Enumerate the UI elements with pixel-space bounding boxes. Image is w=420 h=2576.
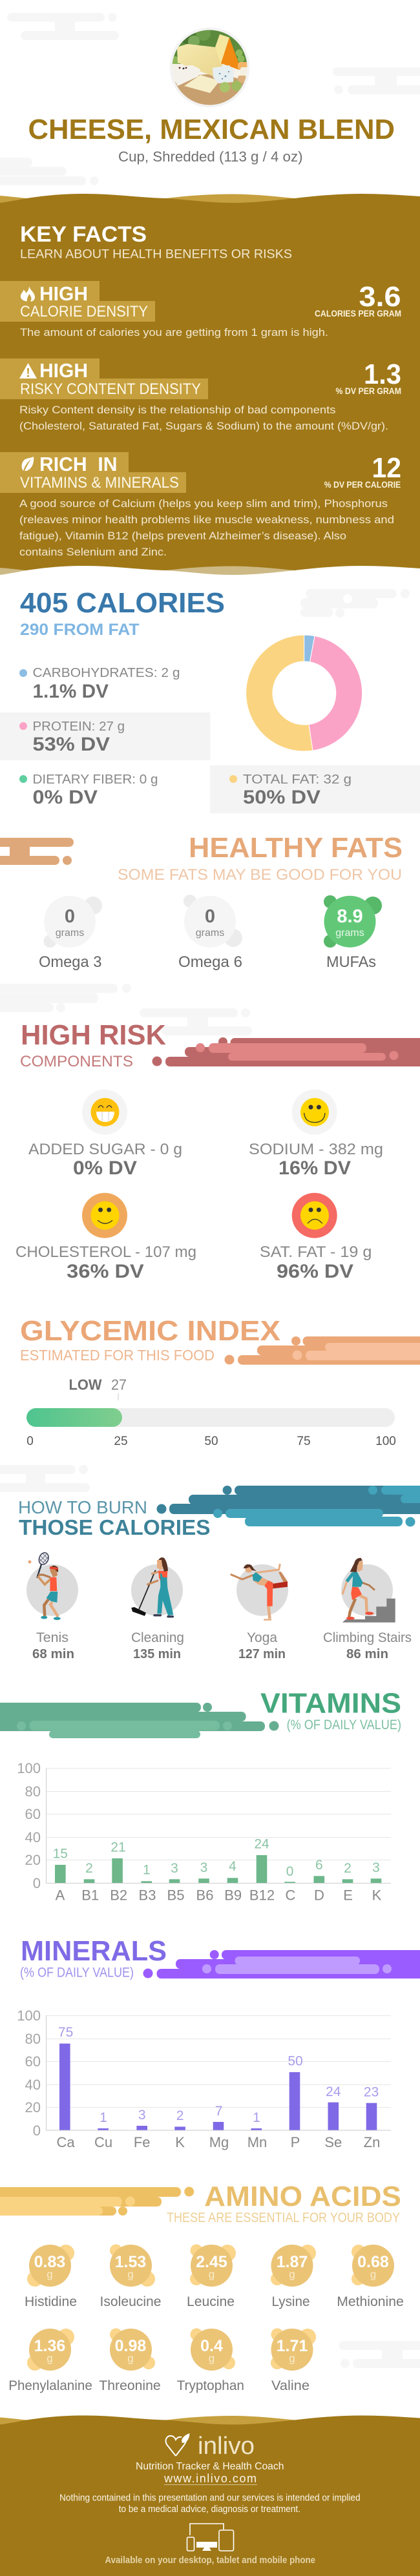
bar chart: vitamins: B9	[224, 1887, 242, 1904]
legend: protein: 53% DV	[32, 734, 110, 755]
description: (releaves minor health problems like muscle weakness, numbness and	[19, 514, 394, 526]
panel: amino acids	[0, 2181, 420, 2393]
amino acids heading: AMINO ACIDS	[204, 2181, 401, 2212]
amino: lysine	[271, 2245, 316, 2309]
bar chart: minerals: 3	[138, 2108, 146, 2123]
decorative bars	[152, 1037, 420, 1066]
amino: methionine: 0.68	[357, 2253, 389, 2271]
amino: threonine	[99, 2328, 161, 2393]
bar chart: vitamins: K	[372, 1887, 382, 1904]
calories heading: 405 CALORIES	[20, 588, 225, 619]
description: A good source of Calcium (helps you keep slim and trim), Phosphorus	[19, 497, 388, 510]
component: saturated fat	[260, 1193, 372, 1282]
bar chart: vitamins: 24	[254, 1837, 269, 1852]
burn heading line 2: THOSE CALORIES	[19, 1515, 211, 1539]
panel: burn calories	[0, 1465, 420, 1661]
icon: leaf	[22, 457, 34, 471]
legend: carbohydrates: CARBOHYDRATES: 2 g	[32, 666, 180, 680]
unit: calories per gram: CALORIES PER GRAM	[315, 309, 401, 318]
amino: isoleucine: 1.53	[115, 2253, 146, 2271]
bar chart: minerals: Se	[324, 2134, 342, 2150]
unit: dv per calorie: % DV PER CALORIE	[324, 480, 401, 490]
activity: yoga	[231, 1564, 288, 1661]
bar chart: vitamins: 21	[110, 1840, 126, 1855]
amino: valine: g	[289, 2353, 295, 2365]
amino: leucine	[187, 2244, 236, 2309]
amino: methionine: Methionine	[337, 2294, 404, 2309]
panel: calories	[0, 588, 420, 813]
fact: risky content density	[0, 358, 401, 432]
legend: total fat: 50% DV	[243, 787, 320, 808]
bar chart: minerals	[17, 2008, 391, 2150]
icon: devices	[187, 2524, 234, 2551]
value: 1.3: 1.3	[364, 358, 401, 390]
bar chart: minerals: Ca	[57, 2134, 75, 2150]
legend: dietary fiber: 0% DV	[32, 787, 98, 808]
bar chart: minerals: 100	[17, 2008, 41, 2024]
bar chart: vitamins: 15	[53, 1847, 68, 1862]
activity: climbing stairs	[323, 1558, 412, 1661]
label: high: HIGH	[39, 282, 88, 305]
legend: carbohydrates	[19, 666, 180, 702]
disclaimer	[59, 2493, 361, 2515]
background clouds top	[0, 13, 420, 185]
key facts subheading: LEARN ABOUT HEALTH BENEFITS OR RISKS	[20, 247, 292, 261]
amino: methionine: g	[370, 2269, 376, 2281]
gi gauge bar	[26, 1408, 395, 1427]
amino: tryptophan: Tryptophan	[177, 2378, 244, 2393]
bar chart: minerals: Fe	[134, 2134, 151, 2150]
component: saturated fat: 96% DV	[277, 1261, 353, 1282]
decorative bars	[0, 838, 74, 865]
description: The amount of calories you are getting from 1 gram is high.	[20, 326, 328, 338]
amino: threonine: g	[127, 2353, 134, 2365]
bar chart: vitamins: 40	[25, 1829, 41, 1845]
description: fatigue), Vitamin B12 (helps prevent Alzheimer’s disease). Also	[19, 530, 346, 542]
amino: leucine: g	[209, 2269, 215, 2281]
panel: high risk components	[0, 984, 420, 1282]
mufas	[324, 895, 382, 971]
activity: cleaning: 135 min	[133, 1647, 181, 1661]
unit: dv per gram: % DV PER GRAM	[336, 386, 401, 396]
healthy fats subheading: SOME FATS MAY BE GOOD FOR YOU	[118, 866, 402, 884]
fact: calorie density	[0, 281, 401, 338]
omega 6	[178, 895, 242, 971]
burn heading line 1: HOW TO BURN	[18, 1497, 147, 1517]
description: (Cholesterol, Saturated Fat, Sugars & Sodium) to the amount (%DV/gr).	[19, 420, 388, 432]
amino: threonine: Threonine	[99, 2378, 161, 2393]
activity label: Climbing Stairs	[323, 1630, 412, 1645]
activity: tennis	[26, 1552, 78, 1661]
footer	[0, 2416, 420, 2576]
bar chart: minerals: 23	[364, 2085, 379, 2100]
donut chart	[246, 635, 362, 751]
bar chart: vitamins: 20	[25, 1852, 41, 1868]
food photo: cheese platter	[169, 26, 250, 107]
bar chart: vitamins: D	[314, 1887, 324, 1904]
panel: key facts	[0, 194, 420, 585]
glycemic index heading: GLYCEMIC INDEX	[20, 1316, 280, 1347]
amino: histidine	[25, 2245, 77, 2309]
bar chart: minerals: Mg	[209, 2134, 229, 2150]
component: added sugar: 0% DV	[73, 1158, 137, 1179]
omega 3: 0	[65, 906, 75, 927]
decorative bars	[0, 1703, 279, 1738]
activity: tennis: 68 min	[32, 1647, 74, 1661]
component: saturated fat: SAT. FAT - 19 g	[260, 1243, 372, 1261]
amino: phenylalanine: g	[47, 2353, 53, 2365]
bar chart: vitamins: 100	[17, 1760, 41, 1776]
activity: yoga: 127 min	[238, 1647, 286, 1661]
amino: threonine: 0.98	[115, 2337, 146, 2355]
legend: carbohydrates: 1.1% DV	[32, 681, 109, 702]
bar chart: vitamins: 3	[372, 1860, 380, 1875]
legend: protein	[0, 712, 211, 760]
bar chart: vitamins: C	[285, 1887, 295, 1904]
description	[19, 404, 388, 432]
amino: isoleucine	[100, 2244, 162, 2309]
gi axis labels: 50	[204, 1435, 218, 1448]
panel: healthy fats	[0, 832, 403, 971]
bar chart: minerals: 24	[326, 2084, 341, 2099]
bar chart: minerals: 1	[100, 2110, 107, 2125]
bar chart: vitamins: A	[56, 1887, 65, 1904]
high risk subheading: COMPONENTS	[20, 1053, 133, 1070]
legend: dietary fiber: DIETARY FIBER: 0 g	[32, 773, 158, 787]
bar chart: minerals: 80	[25, 2031, 41, 2047]
amino: methionine	[337, 2245, 404, 2309]
bar chart: vitamins: B2	[110, 1887, 127, 1904]
bar chart: vitamins: 60	[25, 1806, 41, 1822]
vitamins heading: VITAMINS	[260, 1688, 401, 1719]
gi axis labels: 75	[297, 1435, 311, 1448]
glycemic index subheading: ESTIMATED FOR THIS FOOD	[20, 1347, 215, 1364]
amino: lysine: g	[289, 2269, 295, 2281]
description: contains Selenium and Zinc.	[19, 546, 167, 558]
bar chart: minerals: 60	[25, 2053, 41, 2070]
activity label: Yoga	[247, 1630, 277, 1645]
component: cholesterol: 36% DV	[67, 1261, 144, 1282]
bar chart: vitamins: 3	[200, 1860, 207, 1875]
amino: valine	[271, 2328, 316, 2393]
amino: histidine: 0.83	[34, 2253, 65, 2271]
amino: lysine: Lysine	[271, 2294, 310, 2309]
label: rich in: RICH IN	[39, 453, 118, 475]
component: cholesterol: CHOLESTEROL - 107 mg	[16, 1243, 196, 1261]
value: 12: 12	[372, 452, 401, 484]
amino: leucine: 2.45	[196, 2253, 227, 2271]
bar chart: vitamins: B6	[196, 1887, 213, 1904]
activity label: Tenis	[36, 1630, 68, 1645]
bar chart: vitamins: 6	[315, 1858, 323, 1873]
bar chart: minerals: Zn	[364, 2134, 380, 2150]
mufas: 8.9	[337, 906, 363, 927]
bar chart: vitamins: 0	[286, 1864, 293, 1879]
title: CHEESE, MEXICAN BLEND	[28, 114, 395, 145]
availability note: Available on your desktop, tablet and mobile phone	[105, 2555, 315, 2566]
label: risky content density: RISKY CONTENT DENSITY	[20, 380, 201, 398]
component: sodium: 16% DV	[278, 1158, 351, 1179]
brand name: inlivo	[198, 2433, 255, 2460]
bar chart: minerals: 0	[33, 2123, 41, 2139]
omega 6: grams	[196, 928, 224, 939]
decorative bars	[143, 1950, 420, 1979]
disclaimer: to be a medical advice, diagnosis or treatment.	[119, 2504, 300, 2515]
omega 3	[39, 896, 102, 971]
bar chart: vitamins: B3	[139, 1887, 156, 1904]
omega 6: Omega 6	[178, 953, 242, 971]
gi rating label: LOW	[68, 1376, 102, 1393]
legend: protein: PROTEIN: 27 g	[32, 720, 125, 734]
component: sodium	[249, 1090, 383, 1179]
legend: total fat: TOTAL FAT: 32 g	[243, 773, 352, 787]
panel: glycemic index	[20, 1316, 420, 1448]
tagline: Nutrition Tracker & Health Coach	[136, 2461, 284, 2472]
amino: tryptophan: 0.4	[200, 2337, 223, 2355]
gi axis labels: 100	[375, 1435, 396, 1448]
healthy fats heading: HEALTHY FATS	[189, 832, 403, 864]
amino: histidine: Histidine	[25, 2294, 77, 2309]
amino: isoleucine: Isoleucine	[100, 2294, 162, 2309]
legend: total fat	[210, 765, 420, 813]
label: high: HIGH	[39, 359, 88, 382]
fact: rich in vitamins and minerals	[0, 452, 401, 558]
amino: lysine: 1.87	[277, 2253, 308, 2271]
icon: flame	[21, 286, 35, 302]
amino: leucine: Leucine	[187, 2294, 235, 2309]
from fat subheading: 290 FROM FAT	[20, 621, 140, 639]
background cloud	[0, 1465, 90, 1492]
bar chart: vitamins: 2	[85, 1861, 93, 1876]
background clouds	[0, 984, 252, 1035]
decorative bars	[156, 1486, 420, 1527]
omega 3: grams	[56, 928, 84, 939]
bar chart: minerals: Cu	[94, 2134, 112, 2150]
bar chart: minerals: Mn	[247, 2134, 267, 2150]
component: added sugar: ADDED SUGAR - 0 g	[28, 1141, 182, 1158]
amino: tryptophan	[177, 2328, 244, 2393]
disclaimer: Nothing contained in this presentation and our services is intended or implied	[59, 2493, 361, 2504]
bar chart: vitamins: B5	[167, 1887, 184, 1904]
key facts heading: KEY FACTS	[20, 222, 147, 247]
activity: cleaning	[131, 1557, 184, 1661]
gi rating label: 27	[111, 1376, 127, 1393]
panel: minerals	[17, 1935, 420, 2150]
amino: phenylalanine: Phenylalanine	[8, 2378, 92, 2393]
icon: warning triangle	[19, 363, 37, 379]
panel: vitamins	[0, 1688, 401, 1904]
bar chart: vitamins: 4	[229, 1859, 236, 1874]
description: Risky Content density is the relationship of bad components	[19, 404, 336, 416]
amino: valine: 1.71	[277, 2337, 308, 2355]
bar chart: minerals: 50	[288, 2054, 303, 2069]
bar chart: vitamins: 0	[33, 1875, 41, 1891]
bar chart: minerals: 7	[215, 2104, 223, 2119]
label: calorie density: CALORIE DENSITY	[20, 303, 148, 320]
decorative bars	[225, 1336, 420, 1365]
component: sodium: SODIUM - 382 mg	[249, 1141, 383, 1158]
bar chart: minerals: 20	[25, 2099, 41, 2115]
omega 3: Omega 3	[39, 953, 101, 971]
omega 6: 0	[205, 906, 215, 927]
amino: valine: Valine	[271, 2378, 310, 2393]
gi axis labels	[26, 1435, 396, 1448]
vitamins subheading: (% OF DAILY VALUE)	[287, 1718, 401, 1732]
bar chart: vitamins: 3	[171, 1861, 178, 1876]
amino: tryptophan: g	[209, 2353, 215, 2365]
gi rating label	[68, 1376, 127, 1400]
decorative bars	[0, 2187, 194, 2216]
bar chart: vitamins: 1	[143, 1863, 151, 1878]
website link: www.inlivo.com	[163, 2472, 257, 2485]
component: cholesterol	[16, 1193, 196, 1282]
bar chart: vitamins: E	[343, 1887, 353, 1904]
bar chart: vitamins: 80	[25, 1783, 41, 1800]
bar chart: minerals: K	[175, 2134, 185, 2150]
mufas: MUFAs	[326, 953, 376, 971]
mufas: grams	[335, 928, 364, 939]
amino: histidine: g	[47, 2269, 53, 2281]
bar chart: vitamins: B1	[81, 1887, 99, 1904]
activity: climbing stairs: 86 min	[346, 1647, 388, 1661]
bar chart: minerals: 2	[176, 2108, 184, 2123]
icon: inlivo heart logo	[166, 2433, 190, 2456]
bar chart: vitamins: 2	[344, 1861, 352, 1876]
activity label: Cleaning	[131, 1630, 184, 1645]
gi axis labels: 0	[26, 1435, 34, 1448]
bar chart: minerals: 40	[25, 2077, 41, 2093]
bar chart: vitamins	[17, 1760, 391, 1904]
serving subtitle: Cup, Shredded (113 g / 4 oz)	[118, 149, 302, 165]
minerals subheading: (% OF DAILY VALUE)	[20, 1966, 134, 1980]
background cloud	[339, 2341, 420, 2368]
bar chart: minerals: 75	[58, 2025, 73, 2040]
amino: phenylalanine: 1.36	[34, 2337, 65, 2355]
bar chart: minerals: P	[291, 2134, 300, 2150]
amino: isoleucine: g	[127, 2269, 134, 2281]
label: vitamins and minerals: VITAMINS & MINERALS	[20, 474, 179, 492]
minerals heading: MINERALS	[21, 1935, 167, 1967]
value: 3.6: 3.6	[359, 281, 401, 313]
high risk heading: HIGH RISK	[21, 1019, 166, 1051]
legend: dietary fiber	[19, 773, 158, 808]
gi axis labels: 25	[114, 1435, 128, 1448]
description	[19, 497, 394, 558]
amino: phenylalanine	[8, 2329, 92, 2393]
bar chart: minerals: 1	[253, 2110, 260, 2125]
bar chart: vitamins: B12	[249, 1887, 275, 1904]
component: added sugar	[28, 1090, 182, 1179]
